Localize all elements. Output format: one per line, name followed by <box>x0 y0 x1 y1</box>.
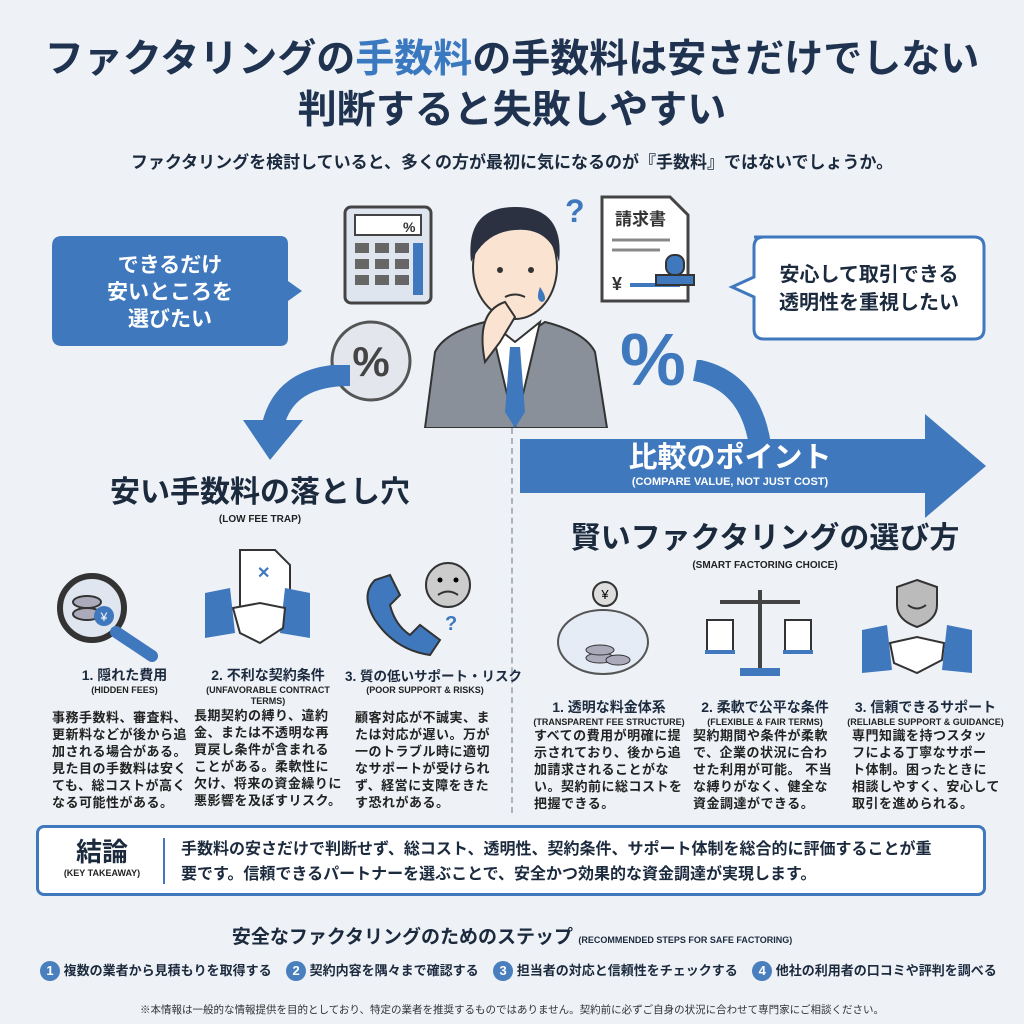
item: reliable support: 専門知識を持つスタッフによる丁寧なサポート体制。困ったときに相談しやすく、安心して取引を進められる。 <box>852 728 1000 811</box>
callout: transparency <box>728 236 986 340</box>
arrow banner: compare points: (COMPARE VALUE, NOT JUST COST) <box>632 476 828 488</box>
heading: low fee trap: 安い手数料の落とし穴 <box>110 476 410 509</box>
callout: transparency: 安心して取引できる <box>780 264 958 286</box>
item: poor support: 顧客対応が不誠実、または対応が遅い。万が一のトラブル時に適切なサポートが受けられず、経営に支障をきたす恐れがある。 <box>355 710 490 810</box>
title <box>45 38 979 132</box>
icon: calculator: % <box>403 219 416 235</box>
item: flexible terms: 契約期間や条件が柔軟で、企業の状況に合わせた利用が可能。 不当な縛りがなく、健全な資金調達ができる。 <box>693 728 832 811</box>
icon: piggy bank: ¥ <box>600 587 609 602</box>
icon: scales <box>705 590 813 676</box>
footer note: ※本情報は一般的な情報提供を目的としており、特定の業者を推奨するものではありません。契約前に必ずご自身の状況に合わせて専門家にご相談ください。 <box>140 1004 884 1016</box>
icon: handshake contract <box>205 549 310 644</box>
steps row: 1 <box>46 963 54 978</box>
callout: cheap: 安いところを <box>107 281 233 304</box>
icon: handshake contract: ✕ <box>257 565 270 582</box>
callout: transparency: 透明性を重視したい <box>779 292 959 314</box>
item: hidden fees: 事務手数料、審査料、更新料などが後から追加される場合がある。見た目の手数料は安くても、総コストが高くなる可能性がある。 <box>52 710 187 810</box>
icon: invoice with stamp: ¥ <box>612 274 622 294</box>
icon: percent circle: % <box>352 338 390 385</box>
panel: conclusion: 結論 <box>76 837 128 867</box>
divider dashed <box>511 428 513 813</box>
item: reliable support: (RELIABLE SUPPORT & GUIDANCE) <box>847 717 1004 727</box>
arrow: curved to right banner <box>693 360 770 439</box>
item: unfavorable terms: TERMS) <box>251 696 285 706</box>
icon: invoice with stamp: 請求書 <box>615 209 666 229</box>
item: transparent fee: (TRANSPARENT FEE STRUCTURE) <box>533 717 685 727</box>
arrow banner: compare points <box>520 414 986 518</box>
item: flexible terms: 2. 柔軟で公平な条件 <box>701 699 829 715</box>
steps row: 2 <box>292 963 300 978</box>
subtitle: ファクタリングを検討していると、多くの方が最初に気になるのが『手数料』ではないでしょうか。 <box>131 153 893 172</box>
heading: smart choice: (SMART FACTORING CHOICE) <box>692 560 838 571</box>
icon: calculator <box>344 206 432 304</box>
title: ファクタリングの手数料の手数料は安さだけでしない <box>45 38 979 81</box>
icon: worried businessman <box>424 193 608 428</box>
item: unfavorable terms: 2. 不利な契約条件 <box>211 667 325 683</box>
icon: worried businessman: ? <box>565 193 585 229</box>
title: 判断すると失敗しやすい <box>298 89 726 132</box>
item: hidden fees: (HIDDEN FEES) <box>91 685 158 695</box>
icon: phone sad: ? <box>445 613 457 635</box>
icon: magnifier coins <box>57 573 158 662</box>
callout: cheap: 選びたい <box>128 308 212 331</box>
item: transparent fee: すべての費用が明確に提示されており、後から追加請求されることがない。契約前に総コストを把握できる。 <box>534 728 683 811</box>
heading: smart choice <box>571 522 959 571</box>
arrow: curved down-left <box>243 365 350 460</box>
callout: cheap <box>52 236 302 346</box>
panel: conclusion <box>36 825 986 896</box>
heading: steps: 安全なファクタリングのためのステップ (RECOMMENDED STEPS FOR SAFE FACTORING) <box>232 927 792 948</box>
steps row: 4 <box>759 963 766 978</box>
item: unfavorable terms: (UNFAVORABLE CONTRACT <box>206 685 330 695</box>
icon: percent blue: % <box>620 318 686 401</box>
callout: cheap: できるだけ <box>118 254 222 277</box>
item: hidden fees: 1. 隠れた費用 <box>82 667 167 683</box>
item: flexible terms: (FLEXIBLE & FAIR TERMS) <box>707 717 823 727</box>
icon: percent circle <box>330 320 412 402</box>
steps row: 3 <box>500 963 507 978</box>
icon: piggy bank <box>557 581 649 675</box>
icon: shield handshake <box>862 579 972 674</box>
item: poor support: (POOR SUPPORT & RISKS) <box>366 685 484 695</box>
icon: phone sad <box>366 562 471 656</box>
steps row: 複数の業者から見積もりを取得する 契約内容を隅々まで確認する 担当者の対応と信頼性をチェックする 他社の利用者の口コミや評判を調べる <box>64 963 997 978</box>
heading: low fee trap: (LOW FEE TRAP) <box>219 514 301 525</box>
item: poor support <box>345 669 522 810</box>
arrow banner: compare points: 比較のポイント <box>628 442 832 474</box>
heading: low fee trap <box>110 476 410 525</box>
item: poor support: 3. 質の低いサポート・リスク <box>345 669 522 684</box>
item: unfavorable terms: 長期契約の縛り、違約金、または不透明な再買戻し条件が含まれることがある。柔軟性に欠け、将来の資金繰りに悪影響を及ぼすリスク。 <box>194 708 342 808</box>
item: reliable support: 3. 信頼できるサポート <box>855 699 996 715</box>
item: transparent fee: 1. 透明な料金体系 <box>552 699 666 715</box>
item: hidden fees <box>52 667 187 810</box>
panel: conclusion: 手数料の安さだけで判断せず、総コスト、透明性、契約条件、サポート体制を総合的に評価することが重要です。信頼できるパートナーを選ぶことで、安全かつ効果的な資金調達が実現します。 <box>181 841 932 883</box>
panel: conclusion: (KEY TAKEAWAY) <box>64 868 140 878</box>
icon: magnifier coins: ¥ <box>100 610 108 624</box>
heading: smart choice: 賢いファクタリングの選び方 <box>571 522 959 555</box>
icon: invoice with stamp <box>600 196 695 302</box>
